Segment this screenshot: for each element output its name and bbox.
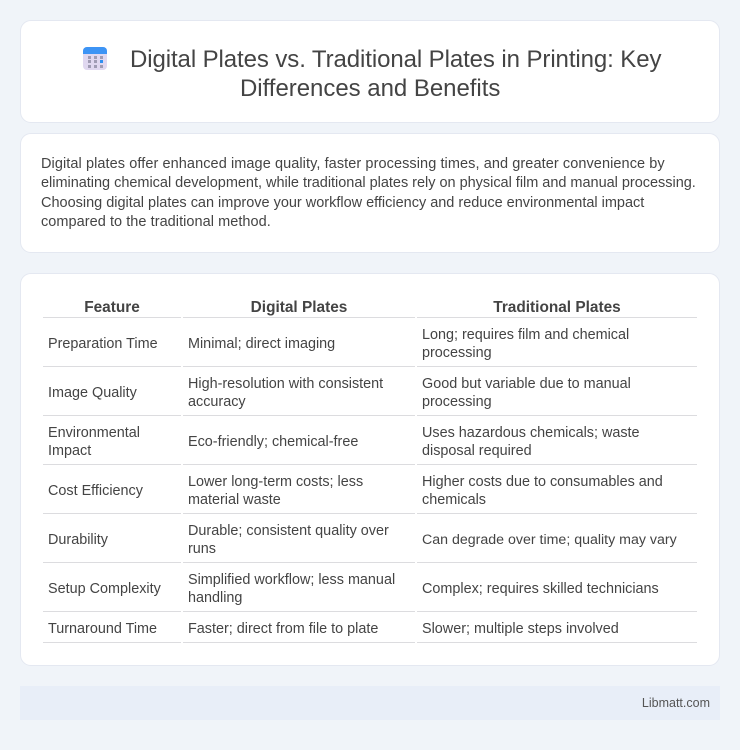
footer bar [20,686,720,720]
intro text: Digital plates offer enhanced image quality, faster processing times, and greater convenience by [41,156,665,172]
row: Image Quality: High-resolution with consistent [188,376,383,392]
row: Environmental Impact: Uses hazardous chemicals; waste [422,425,640,441]
row: Durability: Can degrade over time; quality may vary [422,532,677,548]
row: Setup Complexity: Complex; requires skilled technicians [422,581,659,597]
title: Digital Plates vs. Traditional Plates in Printing: Key [130,46,661,73]
row: Preparation Time: Minimal; direct imaging [188,336,335,352]
row: Durability: Durability [48,532,108,548]
row: Cost Efficiency [48,474,663,508]
row: Environmental Impact: Impact [48,443,91,459]
table header [84,299,621,316]
header card [20,20,720,123]
row: Setup Complexity: Simplified workflow; less manual [188,572,395,588]
table header: Traditional Plates [493,299,621,316]
row: Environmental Impact: Environmental [48,425,140,441]
footer credit: Libmatt.com [642,696,710,710]
row: Turnaround Time: Turnaround Time [48,621,157,637]
row: Cost Efficiency: chemicals [422,492,486,508]
row: Preparation Time: Preparation Time [48,336,158,352]
title: Differences and Benefits [240,75,500,102]
row: Image Quality [48,376,631,410]
intro text: Choosing digital plates can improve your workflow efficiency and reduce environmental impact [41,195,644,211]
row: Turnaround Time [48,621,619,637]
row: Durability [48,523,677,557]
row: Durability: Durable; consistent quality over [188,523,389,539]
row: Environmental Impact: Eco-friendly; chemical-free [188,434,358,450]
table card [20,273,720,666]
row: Turnaround Time: Faster; direct from file to plate [188,621,378,637]
title [130,46,662,102]
row: Setup Complexity: Setup Complexity [48,581,161,597]
row: Preparation Time: Long; requires film and chemical [422,327,629,343]
row: Image Quality: Good but variable due to manual [422,376,631,392]
row: Image Quality: Image Quality [48,385,137,401]
table header: Feature [84,299,140,316]
table header: Digital Plates [251,299,347,316]
intro card [20,133,720,253]
row: Cost Efficiency: Higher costs due to consumables and [422,474,663,490]
intro text: compared to the traditional method. [41,214,271,230]
row: Image Quality: accuracy [188,394,246,410]
intro text: eliminating chemical development, while traditional plates rely on physical film and manual processing. [41,175,696,191]
row: Preparation Time: processing [422,345,492,361]
icon: calendar grid [83,47,107,70]
row: Cost Efficiency: Lower long-term costs; less [188,474,363,490]
comparison table [43,299,697,643]
row: Cost Efficiency: Cost Efficiency [48,483,143,499]
intro text [41,156,696,230]
row: Environmental Impact: disposal required [422,443,532,459]
row: Image Quality: processing [422,394,492,410]
row: Durability: runs [188,541,216,557]
row: Cost Efficiency: material waste [188,492,281,508]
row: Turnaround Time: Slower; multiple steps involved [422,621,619,637]
row: Setup Complexity [48,572,659,606]
row: Setup Complexity: handling [188,590,242,606]
row: Preparation Time [48,327,629,361]
row: Environmental Impact [48,425,640,459]
